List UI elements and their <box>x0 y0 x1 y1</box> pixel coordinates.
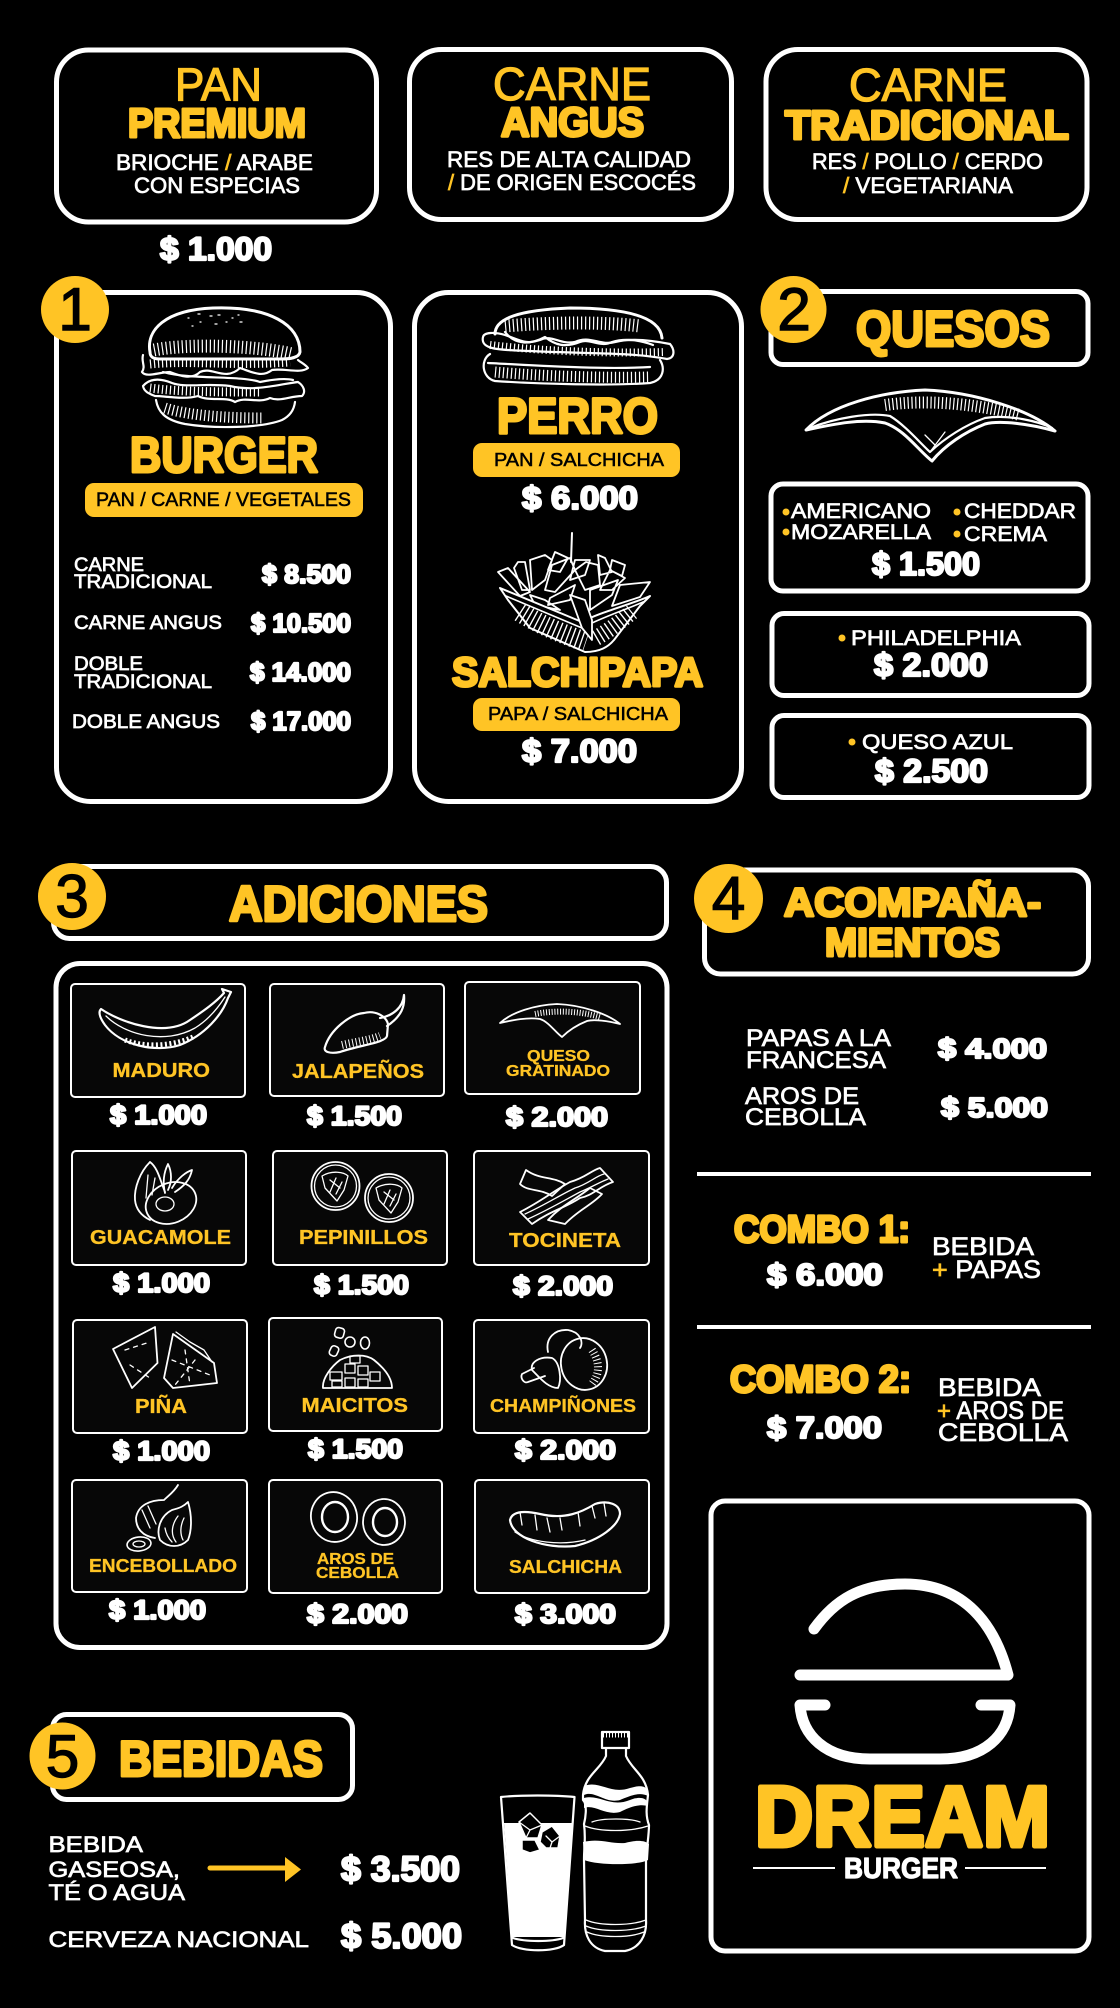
panel: queso americano: MOZARELLA <box>791 521 931 544</box>
panel: philadelphia: PHILADELPHIA <box>851 627 1021 650</box>
combo 2: BEBIDA <box>938 1374 1041 1402</box>
row: bebida gaseosa: GASEOSA, <box>48 1857 180 1882</box>
price: cerveza: $ 5.000 <box>341 1917 462 1956</box>
price: $ 2.500 <box>875 753 988 789</box>
item: aros de cebolla: AROS DE <box>317 1551 394 1568</box>
row: aros de cebolla: CEBOLLA <box>745 1104 866 1131</box>
combo 1: + PAPAS <box>932 1256 1041 1284</box>
item: champinones <box>474 1320 649 1433</box>
icon: bacon <box>520 1168 613 1224</box>
price: tocineta: $ 2.000 <box>513 1271 613 1301</box>
price: champinones: $ 2.000 <box>515 1435 616 1465</box>
panel: queso americano: AMERICANO <box>791 500 931 523</box>
badge 2: 2 <box>777 276 811 343</box>
icon: pickles <box>312 1162 413 1222</box>
row: papas a la francesa: $ 4.000 <box>938 1033 1047 1064</box>
price: perro: $ 6.000 <box>522 480 638 516</box>
item: pepinillos <box>273 1151 447 1265</box>
panel: queso americano: CHEDDAR <box>964 500 1076 523</box>
row: carne tradicional <box>74 555 351 593</box>
panel: queso americano: CREMA <box>964 523 1047 546</box>
heading: adiciones: ADICIONES <box>229 876 488 932</box>
combo 2 <box>730 1359 1068 1447</box>
row: doble tradicional: $ 14.000 <box>250 657 351 687</box>
badge 1 <box>41 276 109 343</box>
combo 1: BEBIDA <box>932 1233 1034 1261</box>
item: maduro <box>71 984 245 1097</box>
row: bebida gaseosa <box>48 1832 185 1905</box>
price: $ 2.000 <box>874 647 988 683</box>
badge 5 <box>30 1722 96 1790</box>
pill: salchipapa ingredients: PAPA / SALCHICHA <box>488 704 668 724</box>
item: champinones: CHAMPIÑONES <box>490 1395 636 1416</box>
item: jalapenos: JALAPEÑOS <box>292 1060 424 1083</box>
heading panel: acompanamientos <box>694 864 1088 974</box>
label: cerveza nacional: CERVEZA NACIONAL <box>48 1927 309 1952</box>
icon: sausage <box>510 1502 620 1546</box>
item: encebollado: ENCEBOLLADO <box>89 1556 237 1576</box>
item: queso gratinado: GRATINADO <box>506 1063 610 1080</box>
item: pina <box>73 1320 247 1433</box>
heading: perro: PERRO <box>497 388 658 444</box>
combo 2: $ 7.000 <box>767 1410 882 1445</box>
price: guacamole: $ 1.000 <box>113 1268 210 1298</box>
icon: avocado <box>135 1162 203 1231</box>
row: bebida gaseosa: TÉ O AGUA <box>48 1880 185 1905</box>
row: papas a la francesa: PAPAS A LA <box>746 1025 891 1052</box>
panel: pan premium <box>56 50 376 222</box>
row: doble angus <box>72 706 351 736</box>
item: queso gratinado <box>465 982 640 1094</box>
badge 1: 1 <box>58 276 92 343</box>
panel: queso azul <box>772 716 1089 798</box>
heading: angus: ANGUS <box>501 99 644 145</box>
combo 1: COMBO 1: <box>734 1209 910 1251</box>
row: aros de cebolla <box>745 1083 1048 1131</box>
heading: burger: BURGER <box>130 427 318 483</box>
heading: pan: PAN <box>175 58 262 110</box>
panel: carne angus <box>410 50 732 220</box>
logo: burger mark <box>800 1584 1010 1759</box>
badge 3 <box>38 863 106 930</box>
pill: ingredients: PAN / CARNE / VEGETALES <box>96 490 351 511</box>
item: pepinillos: PEPINILLOS <box>299 1227 428 1249</box>
icon: glass <box>501 1796 574 1950</box>
description: vegetariana: / VEGETARIANA <box>843 173 1013 198</box>
heading: carne: CARNE <box>849 59 1007 111</box>
arrow <box>210 1857 301 1882</box>
row: doble tradicional: DOBLE <box>74 654 143 675</box>
item: tocineta: TOCINETA <box>509 1230 621 1252</box>
item: guacamole: GUACAMOLE <box>90 1227 231 1249</box>
icon: banana <box>100 989 231 1048</box>
heading: premium: PREMIUM <box>128 100 306 146</box>
icon: mushrooms <box>521 1330 612 1394</box>
item: encebollado <box>72 1480 247 1592</box>
item: aros de cebolla: CEBOLLA <box>316 1565 399 1582</box>
description: especias: CON ESPECIAS <box>134 173 300 198</box>
heading: carne: CARNE <box>493 58 651 110</box>
heading panel: quesos <box>760 276 1088 364</box>
item: pina: PIÑA <box>135 1395 187 1418</box>
combo 2: + AROS DE <box>937 1397 1064 1425</box>
price: maduro: $ 1.000 <box>110 1100 207 1130</box>
item: guacamole <box>72 1151 246 1265</box>
row: carne angus: $ 10.500 <box>251 608 351 638</box>
row: carne angus <box>74 608 351 638</box>
icon: cheese <box>500 1004 620 1037</box>
price: salchicha: $ 3.000 <box>515 1599 616 1629</box>
heading: bebidas: BEBIDAS <box>119 1731 323 1787</box>
combo 2: CEBOLLA <box>938 1419 1068 1447</box>
row: papas a la francesa <box>746 1025 1047 1074</box>
heading: tradicional: TRADICIONAL <box>785 102 1069 148</box>
panel: queso azul: QUESO AZUL <box>862 731 1013 754</box>
icon: bottle <box>583 1732 649 1951</box>
badge 4 <box>694 864 763 933</box>
icon: onion <box>126 1485 191 1552</box>
heading: salchipapa: SALCHIPAPA <box>452 649 703 695</box>
panel: adiciones grid <box>56 964 667 1648</box>
badge 5: 5 <box>46 1723 79 1790</box>
heading: acompanamientos: ACOMPAÑA- <box>784 879 1041 925</box>
item: maicitos: MAICITOS <box>302 1395 408 1417</box>
description: res alta calidad: RES DE ALTA CALIDAD <box>447 147 691 172</box>
row: doble angus: DOBLE ANGUS <box>72 712 220 733</box>
badge 3: 3 <box>55 863 89 930</box>
pill: salchipapa ingredients <box>473 698 680 731</box>
icon: hot dog <box>483 308 673 384</box>
price: salchipapa: $ 7.000 <box>522 733 637 769</box>
description: origen: / DE ORIGEN ESCOCÉS <box>448 170 696 195</box>
item: aros de cebolla <box>269 1480 442 1593</box>
description: brioche: BRIOCHE / ARABE <box>116 150 313 175</box>
icon: salchipapa <box>498 533 650 652</box>
row: doble tradicional <box>74 654 351 693</box>
row: bebida gaseosa: BEBIDA <box>48 1832 143 1857</box>
panel: perro and salchipapa <box>414 292 742 802</box>
item: salchicha: SALCHICHA <box>509 1557 622 1577</box>
heading: quesos: QUESOS <box>856 301 1050 357</box>
heading panel: adiciones <box>38 863 666 938</box>
badge 2 <box>760 276 826 343</box>
price: bebida: $ 3.500 <box>341 1850 460 1889</box>
heading panel: acompanamientos: MIENTOS <box>825 921 1000 965</box>
panel: philadelphia <box>772 614 1089 696</box>
icon: onion rings <box>306 1488 405 1546</box>
price: $ 1.500 <box>872 546 980 582</box>
panel: carne tradicional <box>766 50 1087 220</box>
price: queso gratinado: $ 2.000 <box>506 1102 608 1132</box>
price: maicitos: $ 1.500 <box>308 1434 403 1464</box>
item: queso gratinado: QUESO <box>527 1048 590 1065</box>
item: jalapenos <box>270 984 444 1096</box>
badge 4: 4 <box>712 865 745 932</box>
description: tipos: RES / POLLO / CERDO <box>812 149 1043 174</box>
combo 1 <box>734 1209 1041 1292</box>
icon: burger <box>142 308 308 427</box>
row: doble tradicional: TRADICIONAL <box>74 672 212 693</box>
pill: perro ingredients <box>473 443 680 477</box>
price: pan premium: $ 1.000 <box>160 231 272 267</box>
icon: corn <box>323 1327 392 1388</box>
item: maduro: MADURO <box>112 1060 210 1082</box>
row: doble angus: $ 17.000 <box>251 706 351 736</box>
row: carne tradicional: TRADICIONAL <box>74 572 212 593</box>
icon: cheese slice <box>806 390 1055 461</box>
row: aros de cebolla: AROS DE <box>745 1083 859 1110</box>
combo 2: COMBO 2: <box>730 1359 911 1401</box>
row: aros de cebolla: $ 5.000 <box>941 1092 1048 1123</box>
heading panel: bebidas <box>30 1714 352 1800</box>
logo: dream: DREAM <box>755 1770 1050 1865</box>
combo 1: $ 6.000 <box>767 1257 883 1292</box>
logo: burger: BURGER <box>844 1853 958 1885</box>
item: maicitos <box>269 1318 442 1431</box>
panel: queso americano <box>771 484 1088 591</box>
price: encebollado: $ 1.000 <box>109 1595 206 1625</box>
price: pepinillos: $ 1.500 <box>314 1270 409 1300</box>
item: tocineta <box>474 1151 649 1265</box>
icon: pineapple <box>113 1327 217 1388</box>
price: aros de cebolla: $ 2.000 <box>307 1599 408 1629</box>
price: jalapenos: $ 1.500 <box>307 1101 402 1131</box>
row: carne angus: CARNE ANGUS <box>74 613 222 634</box>
price: pina: $ 1.000 <box>113 1436 210 1466</box>
icon: jalapeno <box>325 995 404 1053</box>
pill: perro ingredients: PAN / SALCHICHA <box>494 450 664 470</box>
item: salchicha <box>475 1480 649 1593</box>
row: carne tradicional: CARNE <box>74 555 144 576</box>
row: papas a la francesa: FRANCESA <box>746 1047 886 1074</box>
panel: burger <box>41 276 390 802</box>
row: carne tradicional: $ 8.500 <box>262 559 351 589</box>
pill: ingredients <box>85 483 363 517</box>
panel: dream burger logo <box>711 1501 1089 1951</box>
